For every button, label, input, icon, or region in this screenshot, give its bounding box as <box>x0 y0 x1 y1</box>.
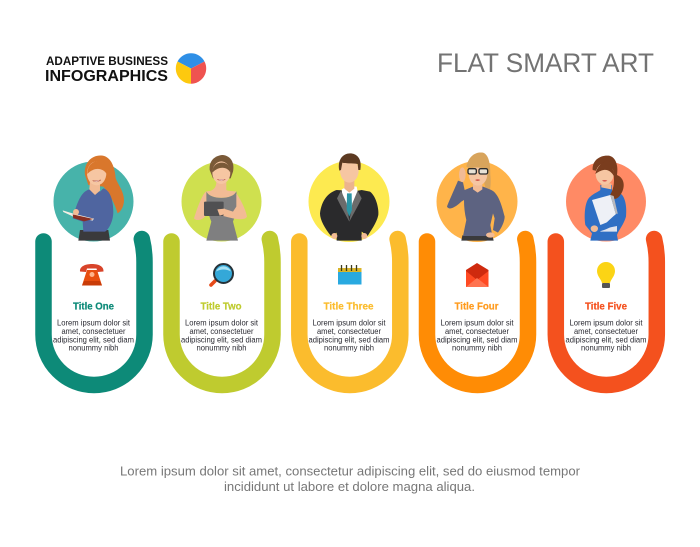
portrait circle two <box>182 162 262 242</box>
u-shaped frame three <box>299 239 400 385</box>
panel five body text: Lorem ipsum dolor sit <box>570 318 643 328</box>
panel five body text <box>566 318 647 352</box>
person: woman with glasses <box>447 152 505 241</box>
panel two body text: amet, consectetuer <box>190 327 254 336</box>
panel five heading: Title Five <box>585 302 627 312</box>
panel four body text <box>436 318 518 352</box>
u-shaped frame five <box>556 239 657 385</box>
panel one body text: adipiscing elit, sed diam <box>53 335 134 344</box>
logo text: INFOGRAPHICS <box>45 68 168 85</box>
footer text block <box>120 464 580 494</box>
panel one body text <box>53 318 134 352</box>
panel: title four <box>427 152 528 385</box>
panel: title one <box>44 155 144 385</box>
panel four body text: nonummy nibh <box>452 344 502 352</box>
panel three body text: adipiscing elit, sed diam <box>308 335 390 344</box>
portrait circle three <box>308 161 390 242</box>
panel five body text: nonummy nibh <box>581 344 631 352</box>
portrait circle one <box>54 162 134 242</box>
panel four body text: adipiscing elit, sed diam <box>436 335 518 344</box>
panel four body text: amet, consectetuer <box>445 327 509 336</box>
portrait circle four <box>436 161 518 242</box>
panel five body text: amet, consectetuer <box>574 327 638 336</box>
panel three body text: Lorem ipsum dolor sit <box>312 318 386 328</box>
person: woman with papers <box>585 156 626 241</box>
logo text <box>45 56 168 85</box>
panel two heading: Title Two <box>200 302 242 312</box>
panel two body text <box>181 318 262 352</box>
panel: title three <box>299 153 400 385</box>
panel one body text: Lorem ipsum dolor sit <box>57 318 131 328</box>
panel one body text: amet, consectetuer <box>62 327 126 336</box>
logo text: ADAPTIVE BUSINESS <box>46 56 168 68</box>
panel five body text: adipiscing elit, sed diam <box>566 335 647 344</box>
person: woman with notebook <box>63 155 124 241</box>
logo: adaptive business infographics <box>45 53 206 85</box>
panel two body text: Lorem ipsum dolor sit <box>185 318 259 328</box>
u-shaped frame one <box>44 239 144 385</box>
panel four body text: Lorem ipsum dolor sit <box>440 318 514 328</box>
panel three body text: nonummy nibh <box>324 344 374 352</box>
icon: red telephone <box>80 264 104 286</box>
panel: title two <box>172 155 272 385</box>
panel: title five <box>556 156 657 385</box>
footer text block: Lorem ipsum dolor sit amet, consectetur adipiscing elit, sed do eiusmod tempor <box>120 464 580 478</box>
panel four heading: Title Four <box>454 302 499 312</box>
icon: calendar <box>338 265 362 284</box>
u-shaped frame two <box>172 239 272 385</box>
panel one body text: nonummy nibh <box>68 344 118 352</box>
u-shaped frame four <box>427 239 528 385</box>
icon: magnifier <box>211 264 233 285</box>
panel three body text <box>308 318 390 352</box>
icon: light bulb <box>597 262 615 288</box>
icon: red envelope <box>466 263 488 287</box>
title: FLAT SMART ART <box>437 48 654 78</box>
panel two body text: adipiscing elit, sed diam <box>181 335 262 344</box>
portrait circle five <box>566 162 646 242</box>
panel two body text: nonummy nibh <box>196 344 246 352</box>
person: woman with tablet <box>194 155 247 241</box>
panel three heading: Title Three <box>324 302 374 312</box>
panel one heading: Title One <box>73 302 114 312</box>
icon: logo pie <box>176 53 206 84</box>
panel three body text: amet, consectetuer <box>317 327 381 336</box>
person: man in suit <box>320 153 378 241</box>
footer text block: incididunt ut labore et dolore magna aliqua. <box>224 480 475 494</box>
